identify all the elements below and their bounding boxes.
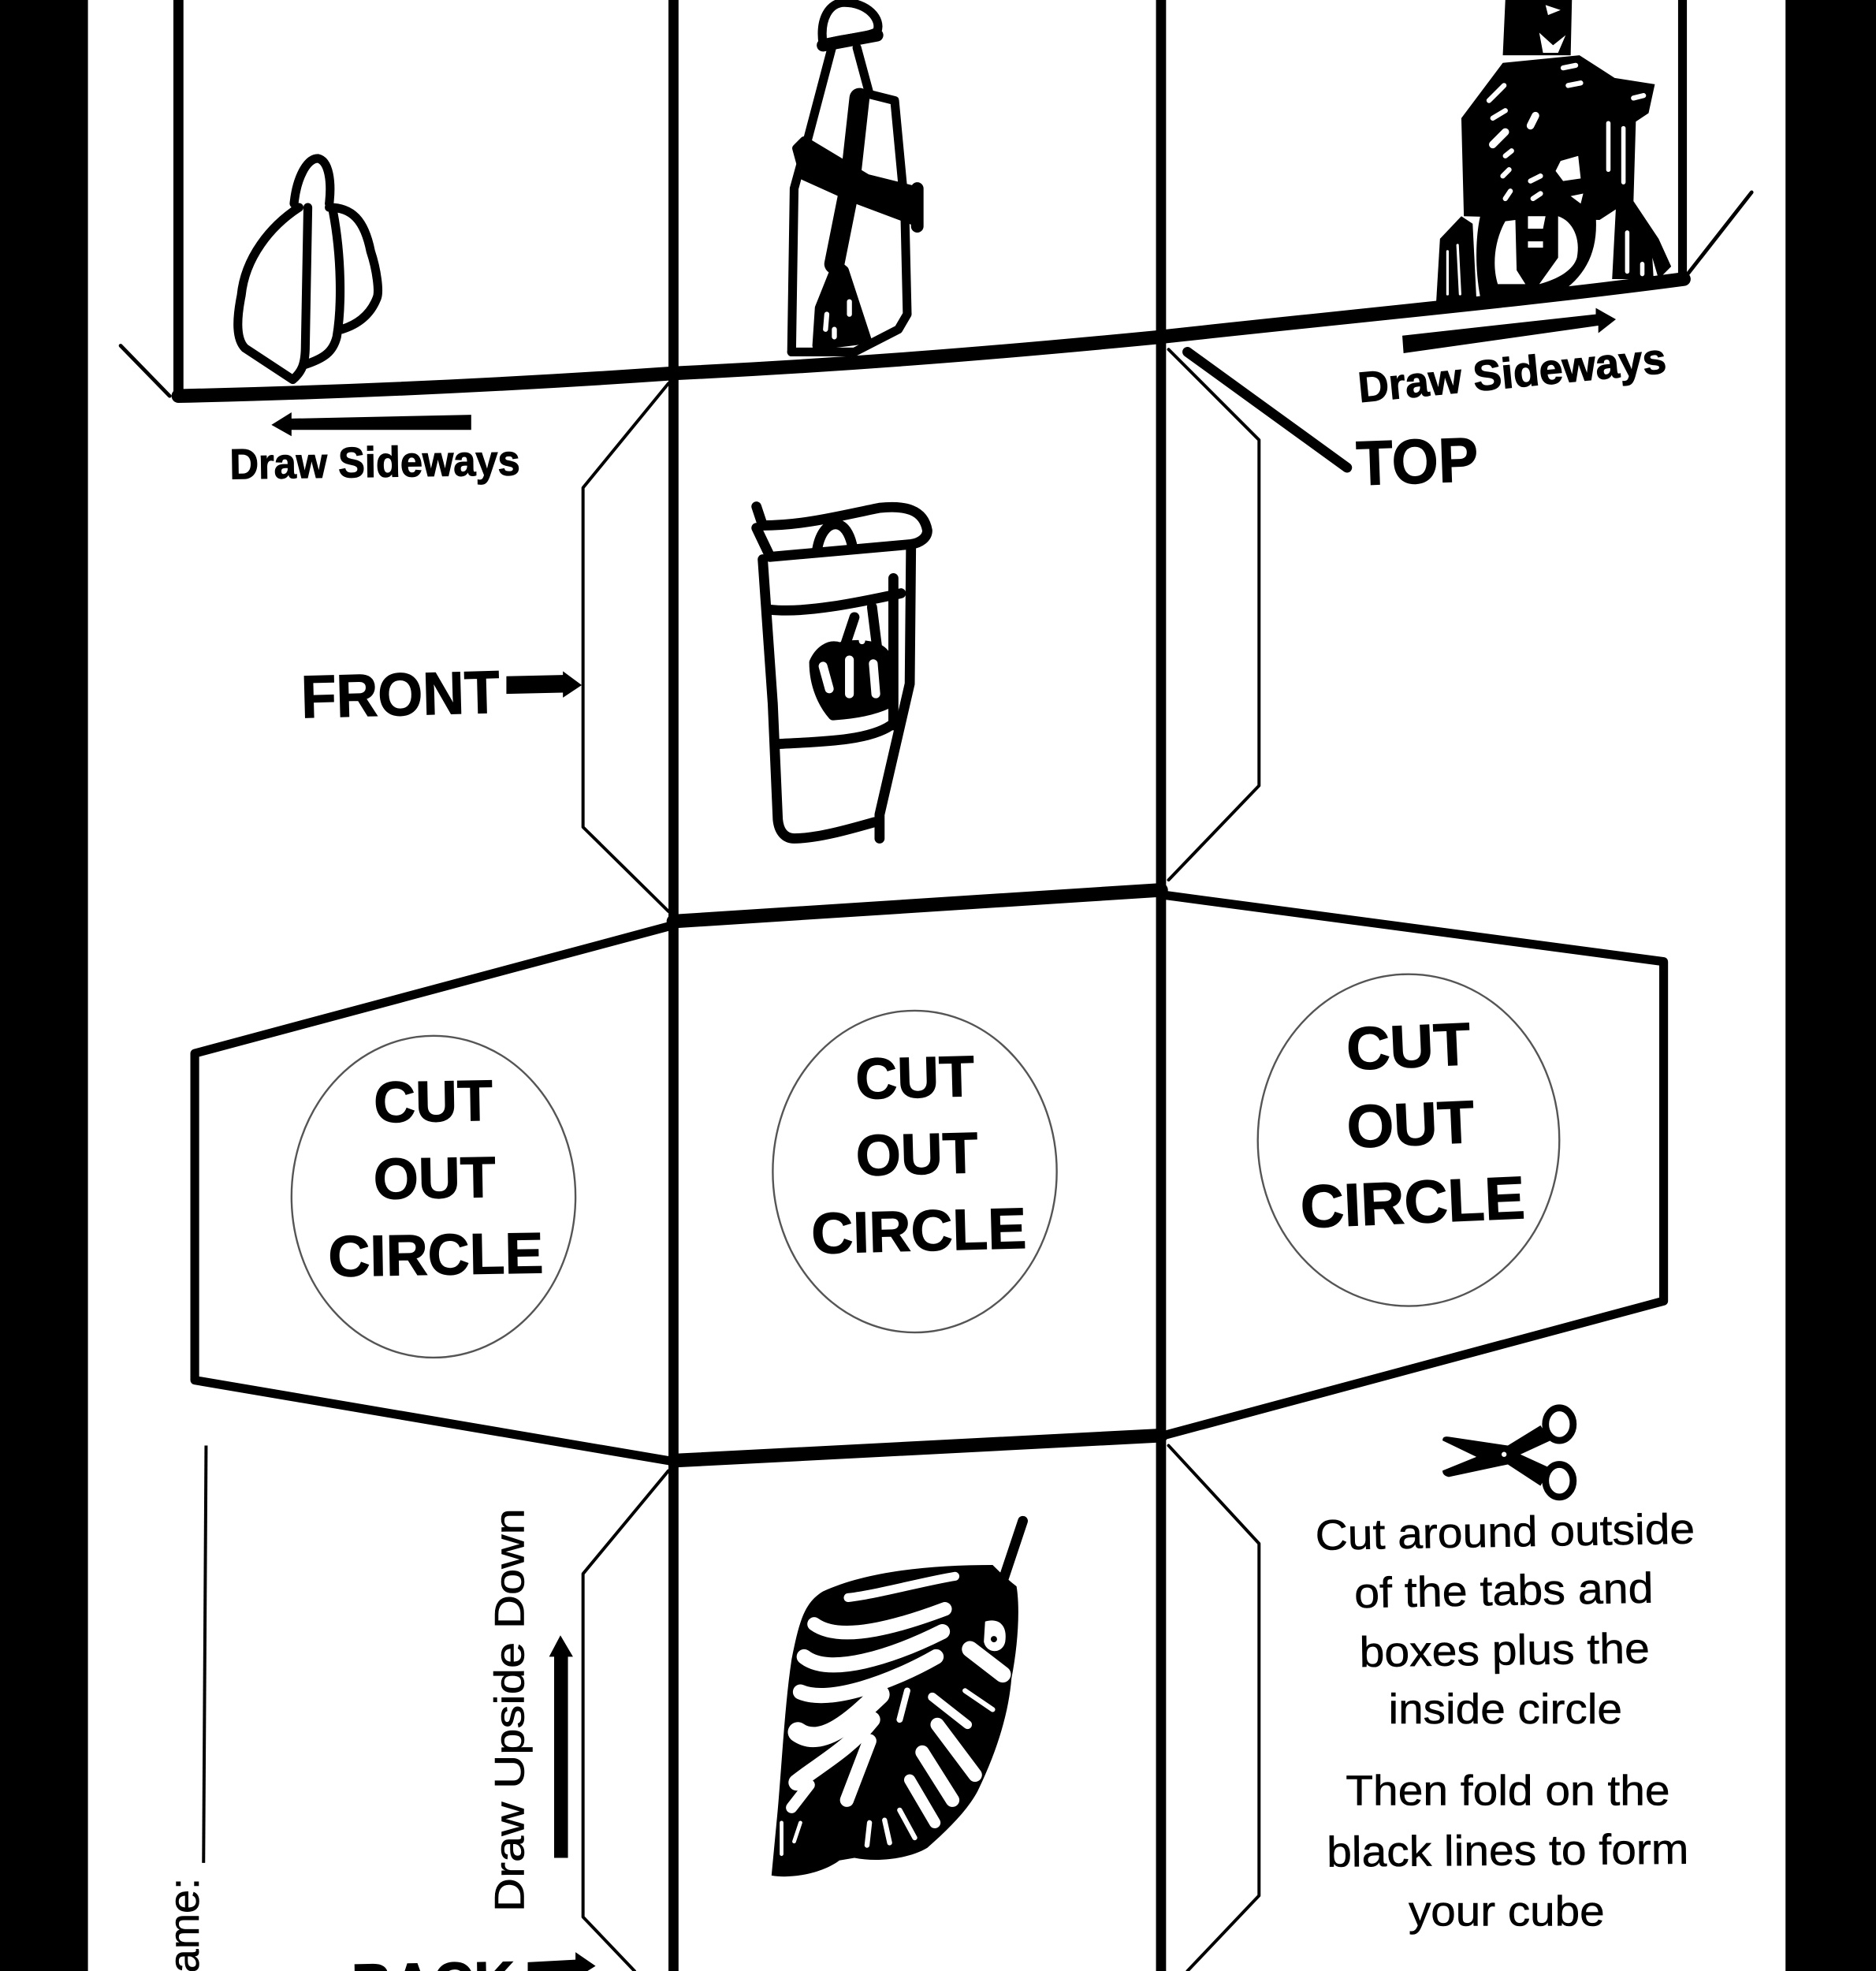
instructions text: of the tabs and — [1354, 1565, 1654, 1617]
label: draw sideways right: Draw Sideways — [1356, 335, 1668, 412]
cut-out circle right: CIRCLE — [1299, 1164, 1526, 1241]
cut-out circle middle: OUT — [855, 1120, 979, 1188]
drawing: leaf — [772, 1521, 1023, 1876]
skeleton left leg — [1436, 216, 1476, 302]
instructions text — [1315, 1505, 1695, 1936]
label: draw upside down: Draw Upside Down — [487, 1508, 534, 1912]
drawing: pumpkin bag — [238, 158, 378, 380]
arrow: front pointer — [506, 671, 582, 698]
cut-out circle left: OUT — [373, 1145, 496, 1212]
instructions text: boxes plus the — [1359, 1625, 1650, 1676]
arrow: draw upside down — [549, 1635, 573, 1858]
cut-out circle left: CIRCLE — [328, 1220, 544, 1289]
cut-out circle right — [1258, 974, 1559, 1306]
cut-out circle middle — [772, 1011, 1057, 1332]
icon: scissors — [1442, 1408, 1573, 1497]
drawing: skeleton — [1436, 0, 1671, 302]
arrow: top pointer — [1187, 352, 1347, 468]
cut-out circle left: CUT — [373, 1068, 493, 1135]
instructions text: your cube — [1409, 1888, 1605, 1936]
cut-out circle right: CUT — [1345, 1011, 1472, 1083]
label: front: FRONT — [300, 659, 501, 731]
drawing: cup with fruit — [757, 507, 927, 838]
arrow: draw sideways right — [1402, 308, 1616, 353]
instructions text: Cut around outside — [1315, 1505, 1695, 1559]
cut-out circle right: OUT — [1346, 1089, 1476, 1161]
skeleton right arm — [1611, 116, 1671, 279]
instructions text: Then fold on the — [1346, 1768, 1670, 1815]
drawing: bottle with broom — [791, 2, 918, 352]
cut-out circle middle: CIRCLE — [810, 1196, 1027, 1266]
cut-out circle left — [292, 1036, 575, 1358]
arrow: draw sideways left — [271, 412, 471, 436]
cut-out circle middle: CUT — [854, 1044, 975, 1112]
name line — [203, 1446, 206, 1863]
instructions text: inside circle — [1388, 1686, 1622, 1733]
skeleton pelvis — [1476, 216, 1596, 296]
label: top: TOP — [1355, 424, 1480, 498]
arrow: back pointer — [528, 1952, 596, 1971]
label: draw sideways left: Draw Sideways — [229, 437, 520, 488]
instructions text: black lines to form — [1327, 1826, 1689, 1876]
